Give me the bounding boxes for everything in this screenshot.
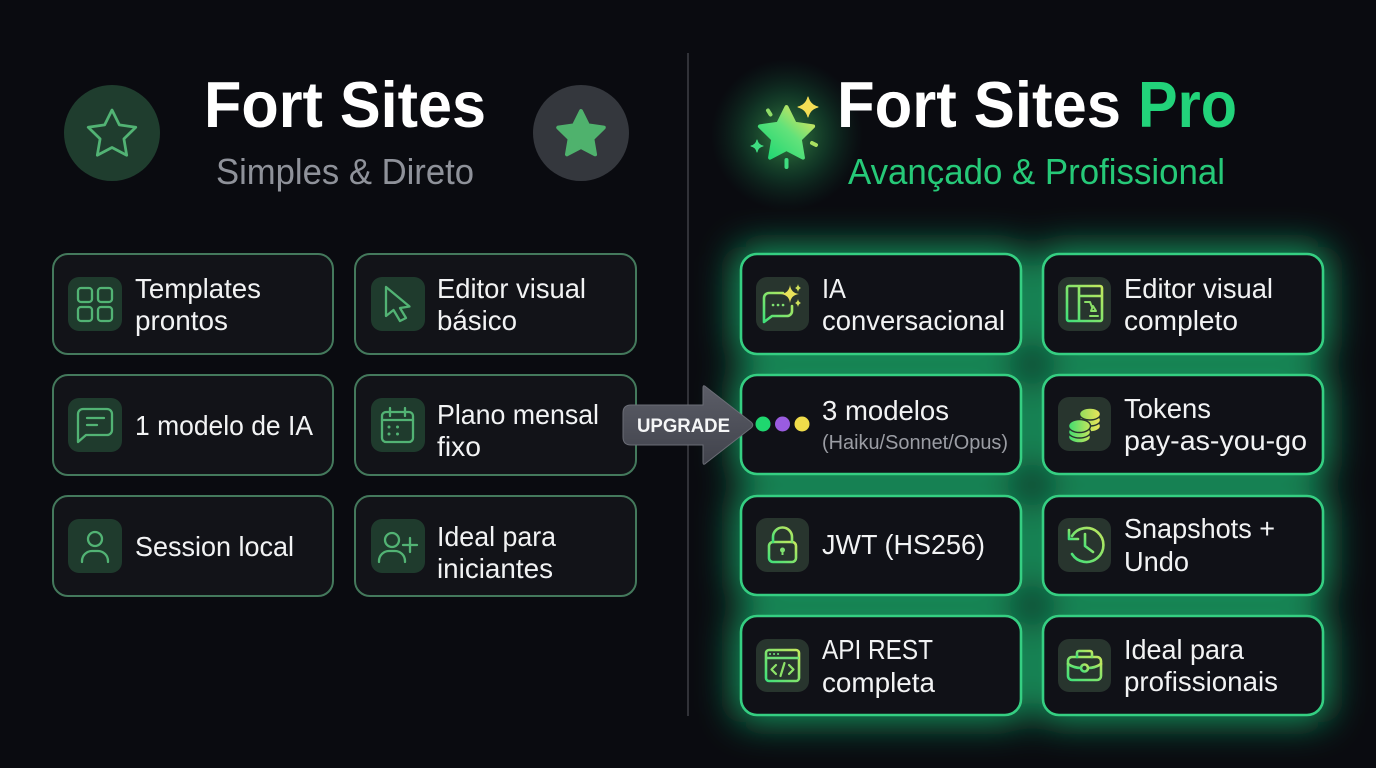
central divider	[687, 53, 689, 716]
card: Tokens pay-as-you-go: Tokens	[1124, 393, 1211, 424]
card: Templates prontos: Templates	[135, 273, 261, 304]
card: IA conversacional: conversacional	[822, 305, 1005, 336]
card: Snapshots + Undo: Snapshots +	[1124, 513, 1275, 544]
icon: AI chat	[764, 284, 801, 322]
card: Editor visual completo	[1043, 254, 1323, 354]
card: Plano mensal fixo: fixo	[437, 431, 481, 462]
card: JWT: JWT (HS256)	[822, 529, 985, 560]
title: Fort Sites: Fort Sites	[204, 68, 486, 141]
arrow: UPGRADE	[623, 386, 753, 464]
card: 3 modelos: 3 modelos	[822, 395, 949, 426]
card glow	[734, 247, 1330, 722]
card: Editor visual básico	[355, 254, 636, 354]
card: Templates prontos	[53, 254, 333, 354]
icon: glowing star with sparkles	[711, 59, 863, 211]
icon: filled star badge	[533, 85, 629, 181]
card: Editor visual completo: Editor visual	[1124, 273, 1273, 304]
title: Fort Sites Pro: Pro	[1138, 68, 1237, 141]
card: 3 modelos: (Haiku/Sonnet/Opus)	[822, 432, 1008, 454]
icon: outline star badge	[64, 85, 160, 181]
card: 1 modelo de IA: 1 modelo de IA	[135, 410, 313, 441]
card: Editor visual completo: completo	[1124, 305, 1238, 336]
icon: user	[82, 532, 108, 562]
card: API REST completa: completa	[822, 667, 935, 698]
card: Plano mensal fixo	[355, 375, 636, 475]
icon: coins	[1068, 408, 1100, 443]
card: Snapshots + Undo: Undo	[1124, 546, 1189, 577]
card: 3 modelos	[741, 375, 1021, 474]
icon: user plus	[379, 533, 417, 562]
subtitle: Simples & Direto: Simples & Direto	[216, 151, 474, 192]
icon: grid	[78, 288, 112, 321]
card: API REST completa: API REST	[822, 634, 933, 665]
card: Templates prontos: prontos	[135, 305, 228, 336]
card: Editor visual básico: Editor visual	[437, 273, 586, 304]
card: JWT	[741, 496, 1021, 595]
card: API REST completa	[741, 616, 1021, 715]
icon: briefcase	[1068, 651, 1101, 680]
card: IA conversacional: IA	[822, 273, 846, 304]
card: Session local: Session local	[135, 531, 294, 562]
card: Ideal para iniciantes	[355, 496, 636, 596]
panel: Fort Sites Pro	[711, 59, 1330, 722]
icon: layout editor	[1067, 286, 1102, 321]
card: Ideal para iniciantes: iniciantes	[437, 553, 553, 584]
icon: code window	[766, 650, 799, 681]
card: IA conversacional	[741, 254, 1021, 354]
icon: lock	[769, 528, 796, 562]
card: Tokens pay-as-you-go: pay-as-you-go	[1124, 425, 1307, 456]
icon: chat bubble	[78, 409, 112, 442]
card: Tokens pay-as-you-go	[1043, 375, 1323, 474]
icon: calendar	[382, 408, 413, 442]
icon: three model dots	[756, 416, 810, 432]
title: Fort Sites Pro: Fort Sites	[837, 68, 1121, 141]
icon: cursor	[386, 287, 410, 321]
card: Ideal para profissionais: profissionais	[1124, 666, 1278, 697]
card: Snapshots + Undo	[1043, 496, 1323, 595]
card: Editor visual básico: básico	[437, 305, 517, 336]
icon: history	[1069, 528, 1103, 562]
card: Ideal para profissionais	[1043, 616, 1323, 715]
subtitle: Avançado & Profissional: Avançado & Profissional	[848, 151, 1225, 192]
card: Session local	[53, 496, 333, 596]
card: Ideal para iniciantes: Ideal para	[437, 521, 556, 552]
card: Plano mensal fixo: Plano mensal	[437, 399, 599, 430]
panel: Fort Sites	[53, 68, 636, 596]
card: 1 modelo de IA	[53, 375, 333, 475]
arrow: UPGRADE: UPGRADE	[637, 416, 730, 437]
card: Ideal para profissionais: Ideal para	[1124, 634, 1244, 665]
